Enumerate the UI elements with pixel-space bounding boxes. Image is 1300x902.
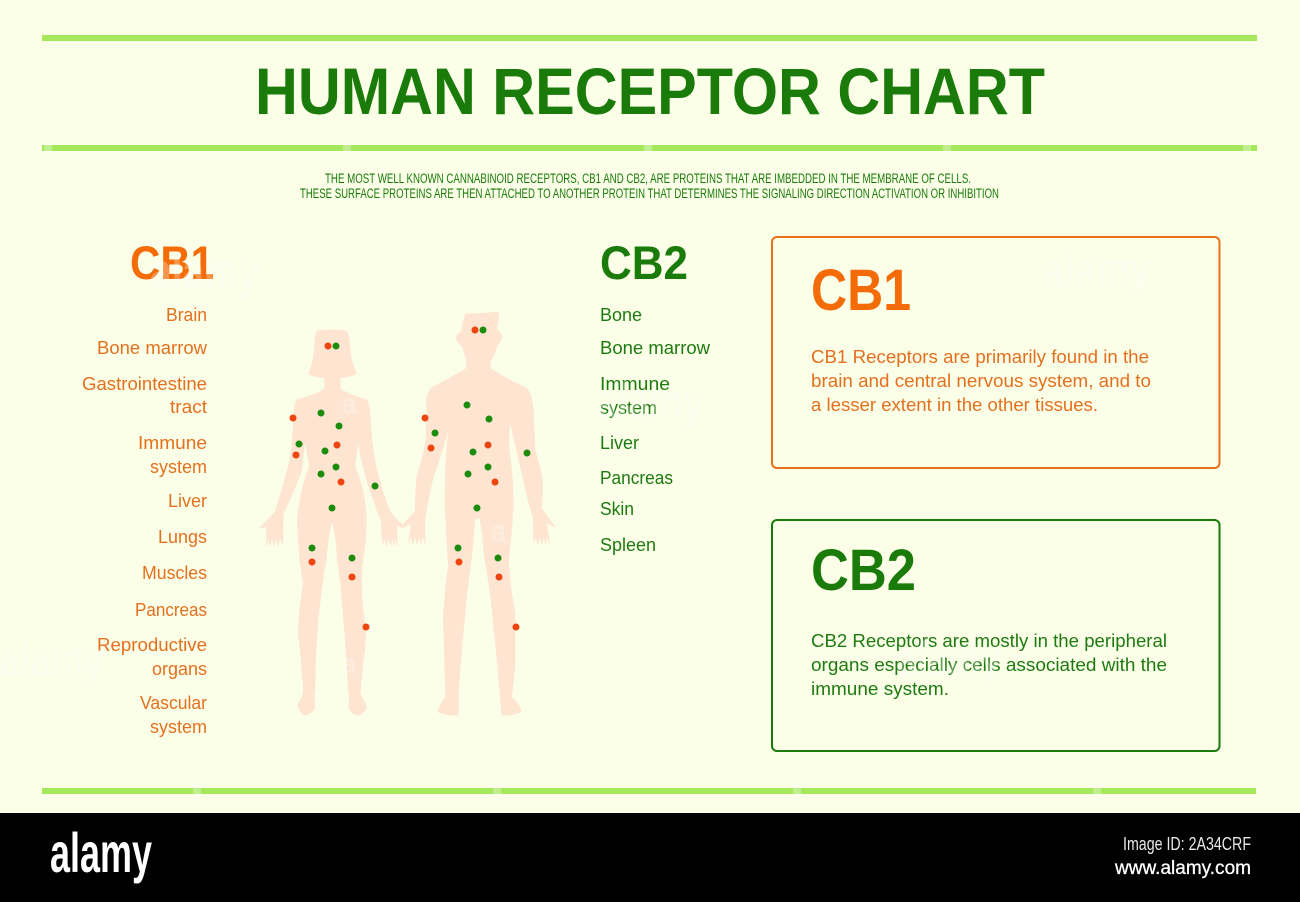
CB1 list items: Immune (138, 433, 207, 453)
CB1 list items: Pancreas (135, 600, 207, 620)
CB1 list items: Liver (168, 491, 207, 511)
CB2 list items: Immune (600, 374, 670, 394)
female receptor dots: CB1 (290, 342, 370, 630)
CB2 list items: Liver (600, 433, 639, 453)
male body figure (401, 312, 556, 715)
CB2 list items: Bone (600, 305, 642, 325)
CB1 panel heading: CB1 (811, 258, 911, 323)
CB2 list items: system (600, 398, 657, 418)
CB1 list items: Vascular (140, 693, 207, 713)
CB1 panel text: a lesser extent in the other tissues. (811, 395, 1098, 415)
CB1 panel text: brain and central nervous system, and to (811, 371, 1151, 391)
CB1 list items: tract (170, 397, 207, 417)
footer logo: alamy (50, 821, 152, 884)
intro text: THE MOST WELL KNOWN CANNABINOID RECEPTORS, CB1 AND CB2, ARE PROTEINS THAT ARE IMBEDDED IN THE MEMBRANE OF CELLS. (325, 171, 971, 186)
CB1 list items (82, 305, 208, 737)
watermarks: a (342, 648, 356, 679)
male receptor dots: CB1 (422, 326, 520, 630)
watermarks: alamy (897, 631, 1001, 687)
footer bar (0, 813, 1300, 902)
CB1 list items: system (150, 457, 207, 477)
panel: CB1 (772, 237, 1220, 468)
male silhouette (401, 312, 556, 715)
title: HUMAN RECEPTOR CHART (255, 54, 1045, 128)
image id: Image ID: 2A34CRF (1123, 834, 1251, 854)
CB2 panel text: CB2 Receptors are mostly in the peripheral (811, 631, 1167, 651)
CB1 receptor list (82, 236, 214, 737)
female receptor dots: CB2 (296, 342, 378, 562)
CB2 receptor list (600, 236, 711, 555)
CB1 list items: Lungs (158, 527, 207, 547)
panel: CB2 (772, 520, 1220, 751)
CB2 list items: Pancreas (600, 468, 673, 488)
CB1 panel text: CB1 Receptors are primarily found in the (811, 347, 1149, 367)
female silhouette (260, 330, 405, 715)
CB1 panel frame (772, 237, 1220, 468)
CB1 list items: Muscles (142, 563, 207, 583)
CB1 list items: Reproductive (97, 635, 207, 655)
website: www.alamy.com (1114, 858, 1251, 879)
CB1 panel text (811, 347, 1151, 415)
watermarks: alamy (150, 243, 260, 299)
watermarks: a (342, 388, 356, 419)
CB2 panel frame (772, 520, 1220, 751)
female body figure (260, 330, 405, 715)
CB2 list items: Skin (600, 499, 634, 519)
male receptor dots: CB2 (432, 326, 530, 562)
watermarks: alamy (0, 631, 104, 687)
intro text (300, 171, 999, 201)
CB2 list items: Spleen (600, 535, 656, 555)
CB2 list items (600, 305, 711, 555)
watermarks: alamy (1043, 242, 1151, 298)
CB2 list heading: CB2 (600, 236, 688, 289)
CB2 panel text: organs especially cells associated with the (811, 655, 1167, 675)
intro text: THESE SURFACE PROTEINS ARE THEN ATTACHED TO ANOTHER PROTEIN THAT DETERMINES THE SIGNALING DIRECTION ACTIVATION OR INHIBITION (300, 186, 999, 201)
CB2 panel heading: CB2 (811, 538, 916, 603)
CB1 list items: Gastrointestine (82, 374, 207, 394)
CB1 list items: Brain (166, 305, 207, 325)
CB1 list items: Bone marrow (97, 338, 208, 358)
CB1 list heading: CB1 (130, 236, 214, 289)
CB2 panel text (811, 631, 1167, 699)
watermarks: a (491, 513, 506, 549)
watermarks (0, 242, 1151, 687)
CB2 list items: Bone marrow (600, 338, 711, 358)
CB1 list items: organs (152, 659, 207, 679)
watermarks: alamy (596, 373, 704, 429)
CB1 list items: system (150, 717, 207, 737)
CB2 panel text: immune system. (811, 679, 949, 699)
